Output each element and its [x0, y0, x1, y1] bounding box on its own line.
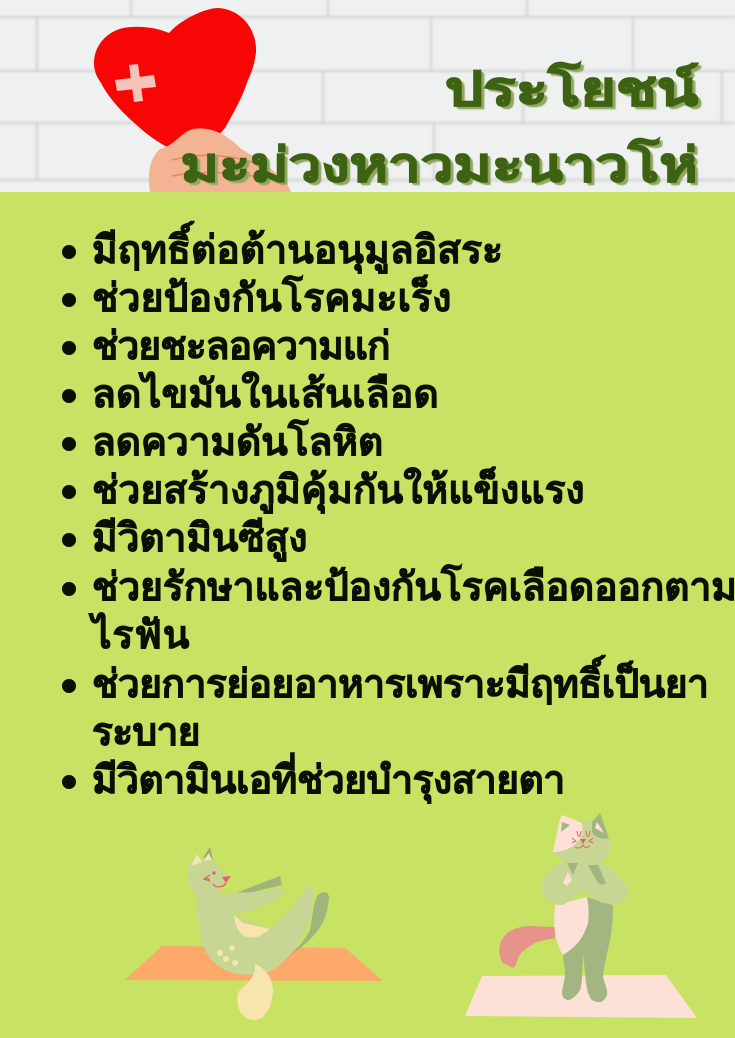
benefits list: ลดไขมันในเส้นเลือด: [92, 373, 439, 416]
benefits list: ช่วยสร้างภูมิคุ้มกันให้แข็งแรง: [92, 469, 585, 512]
title: มะม่วงหาวมะนาวโห่: [181, 138, 698, 191]
benefits list: มีวิตามินซีสูง: [92, 517, 307, 560]
benefits list: ช่วยการย่อยอาหารเพราะมีฤทธิ์เป็นยา: [92, 663, 709, 706]
title: ประโยชน์: [445, 62, 698, 115]
title: [181, 60, 702, 191]
benefits list: ลดความดันโลหิต: [92, 421, 383, 464]
icon: red heart: [94, 8, 256, 150]
benefits list: มีฤทธิ์ต่อต้านอนุมูลอิสระ: [92, 229, 503, 272]
benefits list: [62, 220, 735, 804]
benefits list: มีวิตามินเอที่ช่วยบำรุงสายตา: [92, 759, 565, 802]
benefits list: ช่วยชะลอความแก่: [92, 325, 390, 368]
benefits list: ช่วยป้องกันโรคมะเร็ง: [92, 277, 452, 320]
benefits list: ช่วยรักษาและป้องกันโรคเลือดออกตาม: [92, 566, 735, 609]
benefits list: ไรฟัน: [92, 614, 190, 657]
illustration: cat in prayer pose on pink mat: [465, 813, 697, 1018]
benefits list: ระบาย: [92, 711, 200, 754]
header photo: brick wall with heart and hands: [0, 0, 735, 192]
icon: holding hands: [149, 128, 291, 192]
illustration: cat doing yoga on orange mat: [125, 847, 383, 1020]
